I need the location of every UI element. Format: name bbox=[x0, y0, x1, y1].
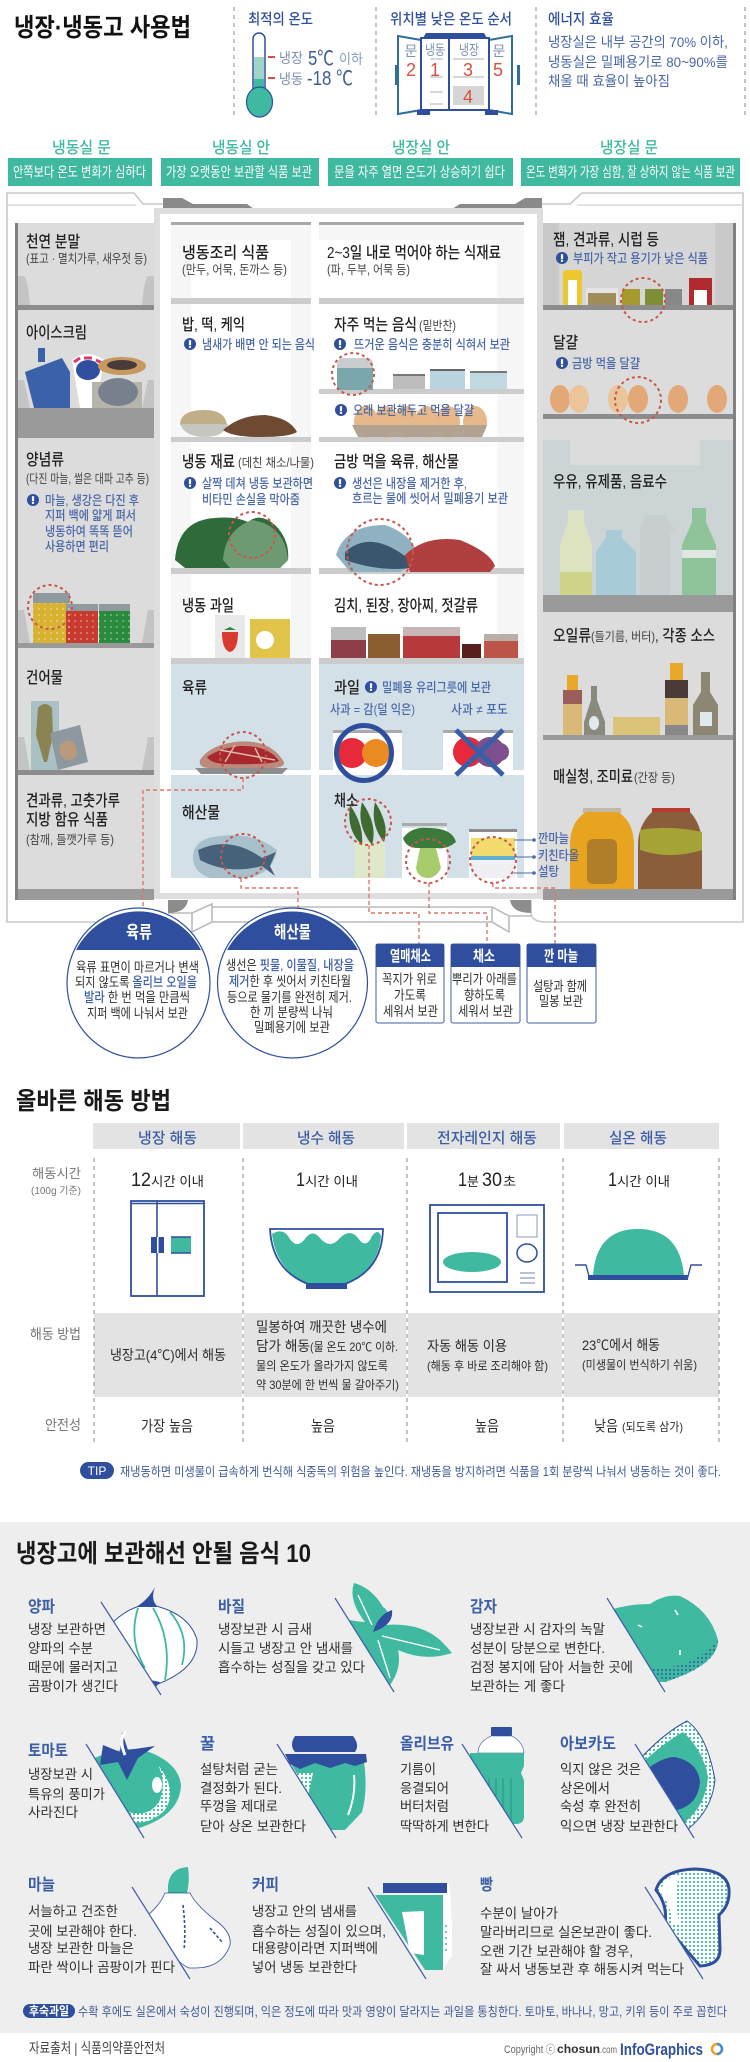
freezer door labels: 지퍼 백에 얇게 펴서 bbox=[45, 508, 136, 523]
fridge door labels: 달걀 bbox=[553, 334, 578, 352]
thaw times: 1 bbox=[296, 1170, 305, 1191]
item: potato bbox=[470, 1596, 718, 1694]
item: garlic: 파란 싹이나 곰팡이가 핀다 bbox=[28, 1960, 176, 1975]
fridge chamber labels: 깐마늘 bbox=[538, 831, 569, 846]
fridge chamber labels: 김치, 된장, 장아찌, 젓갈류 bbox=[334, 597, 478, 615]
fridge chamber labels: 과일 bbox=[334, 679, 360, 697]
illustration: bad fruit pairing bbox=[443, 730, 513, 775]
callout: meat: 육류 표면이 마르거나 변색 bbox=[76, 960, 199, 975]
panel: coldest order by position: 문 bbox=[493, 43, 506, 59]
fridge door labels: 금방 먹을 달걀 bbox=[572, 356, 640, 371]
item: tomato: 냉장보관 시 bbox=[28, 1767, 93, 1782]
row labels: 해동시간 bbox=[32, 1166, 81, 1181]
callout: meat bbox=[67, 908, 210, 1058]
item: coffee: 흡수하는 성질이 있으며, bbox=[252, 1924, 386, 1939]
item: coffee: 냉장고 안의 냄새를 bbox=[252, 1904, 357, 1919]
icon: cold water bowl bbox=[270, 1229, 383, 1289]
icon: microwave bbox=[430, 1205, 544, 1292]
freezer door labels: 마늘, 생강은 다진 후 bbox=[45, 493, 139, 508]
fridge outer body outline bbox=[7, 193, 743, 932]
thaw times: 12 bbox=[131, 1170, 151, 1191]
item: basil: 흡수하는 성질을 갖고 있다 bbox=[218, 1660, 366, 1675]
freezer door labels: 천연 분말 bbox=[26, 233, 80, 251]
panel: energy efficiency: 냉장실은 내부 공간의 70% 이하, bbox=[548, 34, 728, 50]
item: olive oil bbox=[400, 1727, 524, 1838]
freezer labels: 해산물 bbox=[182, 804, 220, 822]
fridge door labels: 잼, 견과류, 시럽 등 bbox=[553, 231, 659, 249]
panel: optimal temperature: 5℃ bbox=[308, 48, 334, 70]
fridge door labels: 부피가 작고 용기가 낮은 식품 bbox=[573, 251, 708, 266]
panel: optimal temperature: 최적의 온도 bbox=[248, 11, 313, 28]
footer copyright: .com bbox=[600, 2045, 617, 2056]
item: tomato: 토마토 bbox=[28, 1742, 68, 1760]
safety row: (되도록 삼가) bbox=[622, 1420, 683, 1434]
right door bbox=[543, 223, 736, 900]
item: onion: 곰팡이가 생긴다 bbox=[28, 1679, 119, 1694]
item: potato: 검정 봉지에 담아 서늘한 곳에 bbox=[470, 1660, 633, 1675]
panel: coldest order by position: 3 bbox=[463, 60, 473, 80]
thaw times: 시간 이내 bbox=[305, 1174, 358, 1189]
freezer door labels: 냉동하여 똑똑 뜯어 bbox=[45, 524, 133, 539]
callout: fruit vegetables: 꼭지가 위로 bbox=[382, 972, 437, 987]
item: olive oil: 딱딱하게 변한다 bbox=[400, 1819, 490, 1834]
fridge door labels: 오일류 bbox=[553, 627, 591, 645]
callout: fruit vegetables: 가도록 bbox=[394, 988, 426, 1003]
row labels: 안전성 bbox=[45, 1417, 81, 1433]
panel: coldest order by position: 냉동 bbox=[425, 42, 445, 58]
panel: coldest order by position: 4 bbox=[463, 87, 473, 107]
footer copyright bbox=[504, 2040, 722, 2059]
thawing method text: (물 온도 20℃ 이하. bbox=[310, 1340, 398, 1354]
item: avocado bbox=[560, 1721, 715, 1838]
thaw times: 시간 이내 bbox=[151, 1174, 204, 1189]
fridge door labels: , 각종 소스 bbox=[655, 627, 715, 645]
item: potato: 보관하는 게 좋다 bbox=[470, 1679, 566, 1694]
fridge chamber labels: 생선은 내장을 제거한 후, bbox=[352, 476, 467, 491]
item: garlic: 마늘 bbox=[28, 1876, 55, 1894]
table header cells: 실온 해동 bbox=[609, 1130, 667, 1147]
safety row: 낮음 bbox=[594, 1418, 618, 1435]
fridge door labels bbox=[553, 231, 715, 786]
illustration: egg tray bbox=[352, 406, 487, 438]
item: basil bbox=[218, 1583, 452, 1692]
freezer labels: 냉동 재료 bbox=[182, 453, 235, 471]
callout: fruit vegetables: 세워서 보관 bbox=[383, 1004, 438, 1019]
safety row: 높음 bbox=[475, 1418, 499, 1435]
item: avocado: 아보카도 bbox=[560, 1735, 616, 1753]
item: honey: 뚜껑을 제대로 bbox=[200, 1799, 278, 1814]
illustration: fresh fish and meat bbox=[336, 519, 495, 585]
illustration: maesil jars bbox=[570, 808, 702, 889]
callout: meat: 육류 bbox=[126, 923, 152, 942]
callout: vegetables bbox=[451, 944, 520, 1023]
item: basil: 시들고 냉장고 안 냄새를 bbox=[218, 1641, 353, 1656]
panel: optimal temperature: 냉동 bbox=[279, 71, 303, 87]
fridge chamber labels: 사과 ≠ 포도 bbox=[451, 702, 508, 717]
note: climacteric fruit: 후숙과일 bbox=[29, 2003, 69, 2018]
zone label: freezer inside: 가장 오랫동안 보관할 식품 보관 bbox=[166, 164, 312, 180]
thaw times: 30 bbox=[482, 1170, 502, 1191]
freezer door labels: (참깨, 들깻가루 등) bbox=[26, 833, 114, 847]
item: onion: 때문에 물러지고 bbox=[28, 1660, 118, 1675]
freezer labels: 밥, 떡, 케익 bbox=[182, 316, 245, 334]
panel: optimal temperature: 이하 bbox=[339, 51, 363, 67]
thaw times: 초 bbox=[503, 1174, 516, 1189]
fridge chamber labels: 채소 bbox=[334, 792, 358, 810]
item: coffee: 커피 bbox=[252, 1876, 279, 1894]
callout: fruit vegetables bbox=[376, 944, 444, 1023]
row labels: (100g 기준) bbox=[31, 1185, 81, 1197]
fridge chamber labels: 오래 보관해두고 먹을 달걀 bbox=[353, 403, 474, 418]
fridge chamber labels: 자주 먹는 음식 bbox=[334, 316, 417, 334]
illustration: seasoning jars bbox=[28, 585, 130, 643]
footer copyright: chosun bbox=[557, 2042, 600, 2056]
illustration: kimchi and paste jars bbox=[331, 627, 518, 658]
item: garlic: 냉장 보관한 마늘은 bbox=[28, 1941, 134, 1956]
item: olive oil: 버터처럼 bbox=[400, 1799, 449, 1814]
item: avocado: 익으면 냉장 보관한다 bbox=[560, 1819, 679, 1834]
zone label: fridge inside: 냉장실 안 bbox=[392, 139, 450, 157]
fridge door labels: (간장 등) bbox=[634, 771, 675, 785]
thaw times: 시간 이내 bbox=[617, 1174, 670, 1189]
freezer labels: (만두, 어묵, 돈까스 등) bbox=[182, 263, 287, 277]
freezer labels: 냄새가 배면 안 되는 음식 bbox=[202, 337, 315, 352]
item: coffee: 넣어 냉동 보관한다 bbox=[252, 1960, 358, 1975]
icon: thermometer bbox=[246, 33, 275, 117]
zone label: fridge door: 냉장실 문 bbox=[600, 139, 658, 157]
item: honey: 결정화가 된다. bbox=[200, 1781, 282, 1796]
freezer labels: 비타민 손실을 막아줌 bbox=[202, 492, 300, 507]
fridge chamber labels: 사과 = 감(덜 익은) bbox=[330, 702, 415, 717]
table header cells: 냉장 해동 bbox=[138, 1130, 197, 1147]
table header cells bbox=[93, 1123, 719, 1149]
center cabinet frame bbox=[154, 208, 543, 899]
callout: peeled garlic bbox=[527, 944, 596, 1023]
heading: 냉장고에 보관해선 안될 음식 10 bbox=[16, 1540, 311, 1568]
safety row bbox=[141, 1418, 683, 1435]
thawing method text: 냉장고(4℃)에서 해동 bbox=[110, 1347, 226, 1363]
fridge chamber labels: (밑반찬) bbox=[419, 318, 456, 333]
thaw times bbox=[131, 1170, 670, 1191]
item: avocado: 숙성 후 완전히 bbox=[560, 1799, 641, 1814]
callout: seafood: 등으로 물기를 완전히 제거. bbox=[227, 990, 352, 1005]
tip callout: TIP bbox=[88, 1464, 106, 1478]
item: avocado: 익지 않은 것은 bbox=[560, 1762, 641, 1777]
fridge chamber labels: 키친타올 bbox=[538, 848, 579, 863]
zone label: fridge door bbox=[521, 139, 740, 186]
heading: thawing methods: 올바른 해동 방법 bbox=[16, 1088, 171, 1115]
footer copyright: InfoGraphics bbox=[620, 2040, 703, 2059]
thawing method text: (해동 후 바로 조리해야 함) bbox=[427, 1359, 548, 1373]
panel: energy efficiency: 냉동실은 밀폐용기로 80~90%를 bbox=[548, 54, 728, 70]
callout: peeled garlic: 설탕과 함께 bbox=[533, 979, 587, 994]
item: honey: 닫아 상온 보관한다 bbox=[200, 1819, 307, 1834]
item: honey bbox=[200, 1736, 367, 1838]
fridge chamber labels: 금방 먹을 육류, 해산물 bbox=[334, 453, 459, 471]
item: garlic bbox=[28, 1867, 230, 1979]
illustration: frozen fruit bbox=[215, 615, 290, 658]
panel: coldest order by position: 위치별 낮은 온도 순서 bbox=[390, 11, 512, 28]
illustration: door eggs bbox=[550, 377, 727, 423]
illustration: frozen fish bbox=[193, 834, 277, 878]
freezer door labels: 사용하면 편리 bbox=[45, 539, 109, 554]
item: bread: 수분이 날아가 bbox=[480, 1906, 558, 1921]
callout: seafood: 한 끼 분량씩 나눠 bbox=[250, 1005, 333, 1020]
safety row: 높음 bbox=[311, 1418, 335, 1435]
item: garlic: 서늘하고 건조한 bbox=[28, 1904, 118, 1919]
zone label: freezer inside: 냉동실 안 bbox=[212, 139, 270, 157]
item: honey: 꿀 bbox=[200, 1736, 215, 1753]
thaw times: 1 bbox=[458, 1170, 467, 1191]
fridge chamber labels: 2~3일 내로 먹어야 하는 식재료 bbox=[327, 244, 501, 262]
item: onion bbox=[28, 1587, 197, 1695]
callout: seafood bbox=[218, 908, 368, 1058]
thawing method text: 약 30분에 한 번씩 물 갈아주기) bbox=[256, 1377, 399, 1392]
freezer door labels bbox=[26, 233, 149, 847]
item: bread bbox=[480, 1869, 729, 1979]
footer copyright: Copyright ⓒ bbox=[504, 2043, 555, 2056]
item: bread: 오랜 기간 보관해야 할 경우, bbox=[480, 1944, 633, 1959]
thawing table bbox=[30, 1123, 719, 1446]
row labels bbox=[30, 1166, 81, 1433]
illustration: oils and sauces bbox=[563, 663, 718, 735]
panel: energy efficiency: 채울 때 효율이 높아짐 bbox=[548, 73, 670, 89]
illustration: dried fish bbox=[31, 701, 88, 770]
freezer labels: 살짝 데쳐 냉동 보관하면 bbox=[202, 476, 313, 491]
safety row: 가장 높음 bbox=[141, 1418, 193, 1435]
panel: energy efficiency: 에너지 효율 bbox=[548, 11, 614, 28]
illustration: meat bbox=[195, 732, 288, 778]
thawing method text: 밀봉하여 깨끗한 냉수에 bbox=[256, 1319, 387, 1335]
callout: peeled garlic: 깐 마늘 bbox=[544, 948, 578, 965]
callout: meat: 되지 않도록 올리브 오일을 bbox=[75, 975, 197, 990]
panel: coldest order by position: 2 bbox=[406, 60, 416, 80]
freezer door labels: 건어물 bbox=[26, 669, 63, 687]
item: onion: 양파의 수분 bbox=[28, 1641, 93, 1656]
freezer labels: 냉동 과일 bbox=[182, 597, 234, 615]
connector lines bbox=[143, 778, 555, 944]
freezer labels: (데친 채소/나물) bbox=[238, 456, 314, 470]
freezer labels bbox=[182, 244, 315, 822]
zone label: fridge inside bbox=[328, 139, 513, 186]
item: tomato: 사라진다 bbox=[28, 1805, 79, 1820]
thawing method text: 23℃에서 해동 bbox=[582, 1337, 660, 1353]
panel: energy efficiency bbox=[536, 7, 745, 118]
table header cells: 냉수 해동 bbox=[297, 1130, 355, 1147]
panel: 10 foods not to refrigerate bbox=[0, 1522, 750, 2033]
thawing method text: 담가 해동 bbox=[256, 1338, 310, 1354]
fridge chamber labels: 설탕 bbox=[538, 864, 559, 879]
icon: refrigerator thawing bbox=[131, 1201, 204, 1296]
zone label: freezer door: 냉동실 문 bbox=[52, 139, 111, 157]
freezer door labels: 양념류 bbox=[26, 451, 64, 469]
callout: meat: 발라 한 번 먹을 만큼씩 bbox=[84, 990, 190, 1005]
item: avocado: 상온에서 bbox=[560, 1781, 610, 1796]
illustration: good fruit pairing bbox=[333, 726, 402, 780]
freezer door labels: 견과류, 고춧가루 bbox=[26, 792, 120, 810]
icon: fridge position map bbox=[395, 33, 520, 115]
thawing method text bbox=[110, 1319, 697, 1392]
callout: peeled garlic: 밀봉 보관 bbox=[539, 994, 583, 1009]
freezer door labels: (표고 · 멸치가루, 새우젓 등) bbox=[26, 252, 147, 266]
illustration: dairy bottles bbox=[560, 508, 716, 595]
table header cells: 전자레인지 해동 bbox=[437, 1130, 537, 1147]
row labels: 해동 방법 bbox=[30, 1326, 81, 1342]
panel: coldest order by position bbox=[376, 7, 520, 118]
callout: seafood: 해산물 bbox=[274, 923, 311, 942]
thaw times: 1 bbox=[608, 1170, 617, 1191]
panel: optimal temperature: -18 ℃ bbox=[307, 68, 353, 90]
item: coffee: 대용량이라면 지퍼백에 bbox=[252, 1941, 378, 1956]
fridge chamber labels: 흐르는 물에 씻어서 밀폐용기 보관 bbox=[352, 491, 508, 506]
callout: vegetables: 뿌리가 아래를 bbox=[452, 972, 517, 987]
fridge chamber labels: (파, 두부, 어묵 등) bbox=[327, 263, 410, 277]
illustration: rice and bread bbox=[180, 410, 297, 437]
illustration: jam shelf bbox=[563, 270, 712, 322]
thawing method text: 물의 온도가 올라가지 않도록 bbox=[256, 1359, 388, 1373]
item: bread: 잘 싸서 냉동보관 후 해동시켜 먹는다 bbox=[480, 1962, 685, 1977]
item: garlic: 곳에 보관해야 한다. bbox=[28, 1924, 137, 1939]
panel: optimal temperature bbox=[234, 7, 363, 118]
freezer door labels: 아이스크림 bbox=[26, 324, 87, 342]
panel: coldest order by position: 문 bbox=[405, 43, 418, 59]
thawing method text: 자동 해동 이용 bbox=[427, 1338, 507, 1354]
fridge door labels: 우유, 유제품, 음료수 bbox=[553, 473, 667, 491]
fridge chamber labels: 밀폐용 유리그릇에 보관 bbox=[382, 680, 491, 695]
fridge chamber labels bbox=[327, 244, 579, 879]
item: onion: 냉장 보관하면 bbox=[28, 1622, 106, 1637]
callout: vegetables: 세워서 보관 bbox=[458, 1004, 513, 1019]
panel: coldest order by position: 1 bbox=[430, 60, 440, 80]
freezer door labels: (다진 마늘, 썰은 대파 고추 등) bbox=[26, 472, 149, 486]
item: bread: 말라버리므로 실온보관이 좋다. bbox=[480, 1925, 652, 1940]
item: potato: 성분이 당분으로 변한다. bbox=[470, 1641, 605, 1656]
thawing method text: (미생물이 번식하기 쉬움) bbox=[582, 1358, 697, 1372]
thaw times: 분 bbox=[467, 1174, 479, 1189]
panel: optimal temperature: 냉장 bbox=[279, 50, 303, 66]
panel: coldest order by position: 5 bbox=[493, 60, 503, 80]
item: tomato: 특유의 풍미가 bbox=[28, 1787, 105, 1802]
refrigerator diagram bbox=[7, 193, 743, 944]
item: honey: 설탕처럼 굳는 bbox=[200, 1762, 278, 1777]
fridge door labels: 매실청, 조미료 bbox=[553, 768, 633, 786]
callout: meat: 지퍼 백에 나눠서 보관 bbox=[87, 1006, 188, 1021]
callout: fruit vegetables: 열매채소 bbox=[390, 948, 431, 965]
item: olive oil: 올리브유 bbox=[400, 1735, 454, 1753]
item: coffee bbox=[252, 1876, 452, 1979]
callout: seafood: 생선은 핏물, 이물질, 내장을 bbox=[226, 958, 354, 973]
zone label: freezer inside bbox=[161, 139, 319, 186]
footer source: 자료출처 | 식품의약품안전처 bbox=[29, 2040, 165, 2056]
callout: seafood: 제거한 후 씻어서 키친타월 bbox=[229, 974, 351, 989]
item: olive oil: 응결되어 bbox=[400, 1781, 449, 1796]
illustration: ice cream bbox=[25, 348, 146, 408]
callout: vegetables: 향하도록 bbox=[464, 988, 505, 1003]
illustration: frozen vegetable bags bbox=[175, 512, 288, 568]
item: tomato bbox=[28, 1732, 181, 1838]
item: potato: 감자 bbox=[470, 1598, 497, 1616]
illustration: pot and side dishes bbox=[332, 353, 507, 395]
icon: room temperature dome bbox=[575, 1229, 702, 1280]
item: basil: 냉장보관 시 금새 bbox=[218, 1622, 312, 1637]
item: basil: 바질 bbox=[218, 1598, 245, 1616]
callout: vegetables: 채소 bbox=[473, 948, 495, 965]
freezer door labels: 지방 함유 식품 bbox=[26, 811, 108, 829]
fridge chamber labels: 뜨거운 음식은 충분히 식혀서 보관 bbox=[354, 337, 510, 352]
title: 냉장·냉동고 사용법 bbox=[14, 14, 191, 42]
item: bread: 빵 bbox=[480, 1876, 493, 1894]
callout: seafood: 밀폐용기에 보관 bbox=[254, 1020, 330, 1035]
freezer labels: 육류 bbox=[182, 679, 207, 697]
zone label: freezer door bbox=[8, 139, 152, 186]
item: olive oil: 기름이 bbox=[400, 1762, 436, 1777]
zone label: freezer door: 안쪽보다 온도 변화가 심하다 bbox=[13, 164, 146, 180]
zone label: fridge inside: 문을 자주 열면 온도가 상승하기 쉽다 bbox=[334, 164, 505, 180]
fridge door labels: (들기름, 버터) bbox=[591, 630, 655, 644]
freezer labels: 냉동조리 식품 bbox=[182, 244, 269, 262]
illustration: vegetables bbox=[345, 799, 536, 883]
item: onion: 양파 bbox=[28, 1598, 55, 1616]
left door bbox=[15, 223, 154, 900]
item: potato: 냉장보관 시 감자의 녹말 bbox=[470, 1622, 605, 1637]
panel: coldest order by position: 냉장 bbox=[459, 42, 479, 58]
